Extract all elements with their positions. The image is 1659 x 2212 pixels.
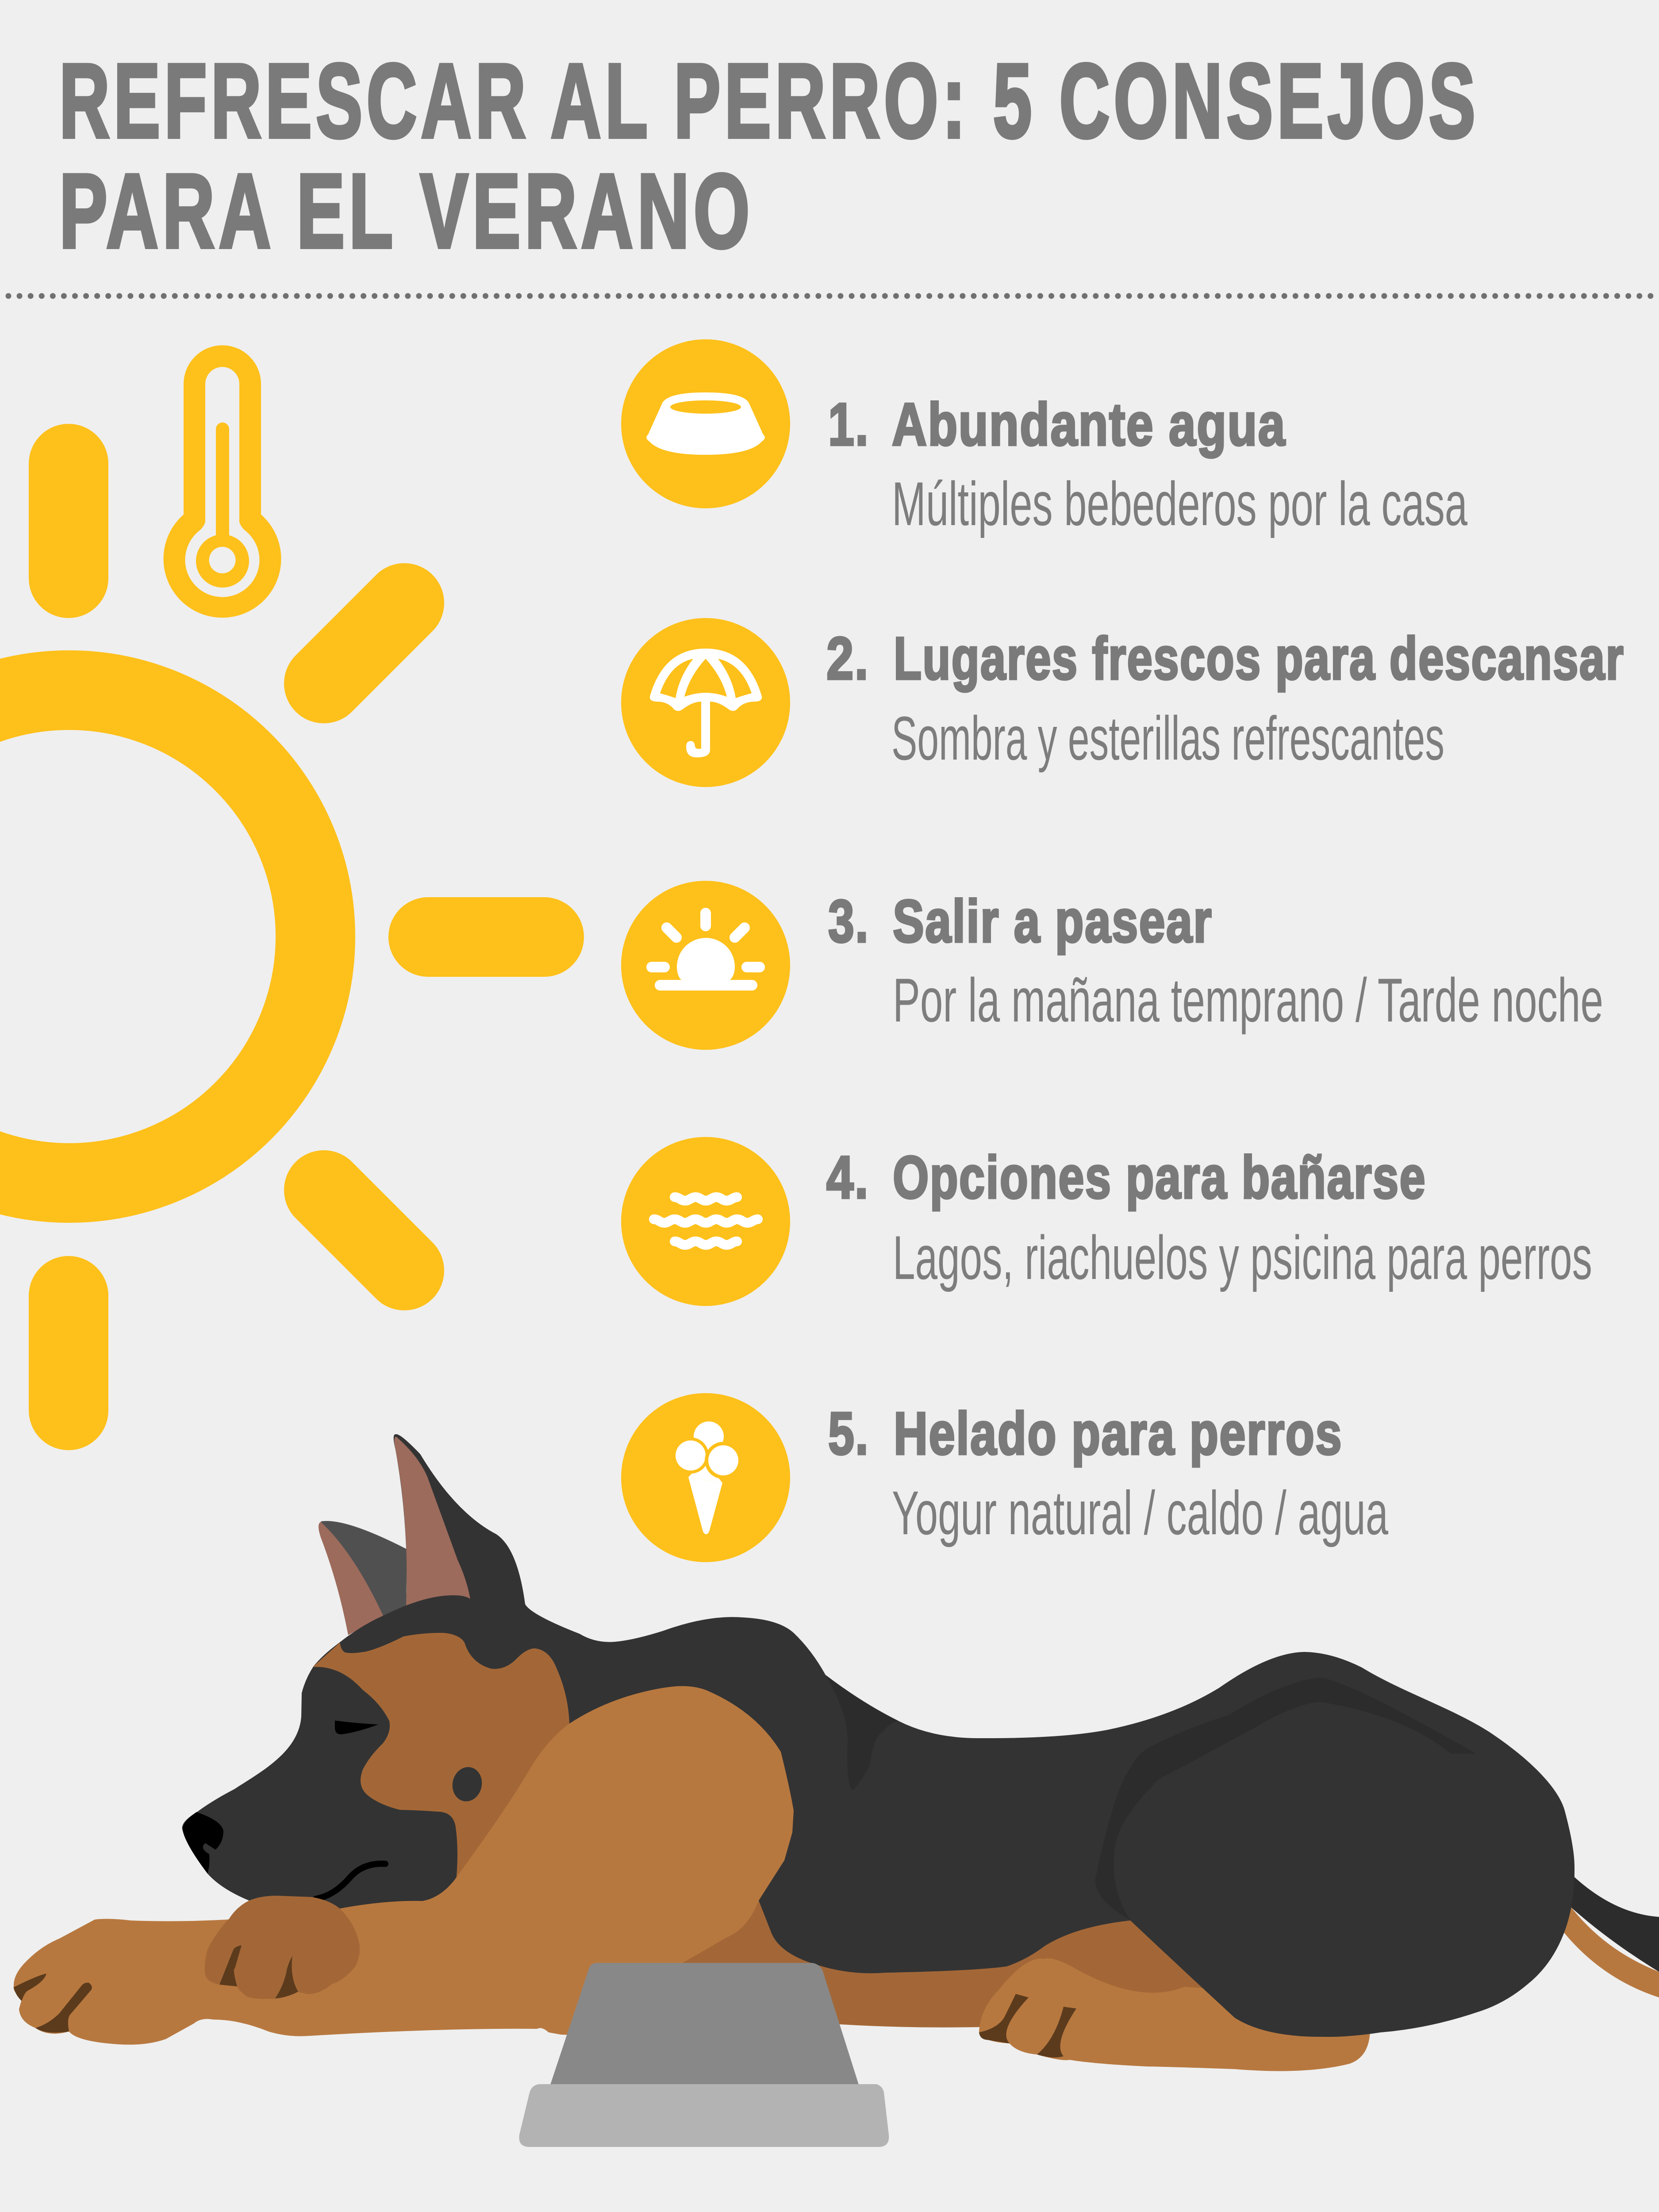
food bowl (519, 1963, 889, 2147)
front paw toes (14, 1974, 92, 2033)
dog tail (1562, 1869, 1659, 1997)
tip 1: water bowl (621, 339, 1467, 538)
front leg and shoulder (14, 1686, 794, 2045)
icon: umbrella (621, 618, 790, 787)
text: tip 5: Yogur natural / caldo / agua (892, 1478, 1388, 1548)
text: tip 3 (828, 887, 1603, 1035)
resting paw (205, 1896, 360, 1999)
text: tip 4: 4. (826, 1144, 869, 1211)
text: tip 4: Opciones para bañarse (893, 1144, 1426, 1211)
icon: water waves (621, 1137, 790, 1306)
title (59, 42, 1479, 270)
icon: sunrise (621, 881, 790, 1050)
text: tip 3: 3. (828, 887, 869, 955)
text: tip 5 (828, 1400, 1388, 1548)
text: tip 5: 5. (828, 1400, 869, 1467)
tip 2: cool places (621, 618, 1624, 787)
text: tip 5: Helado para perros (894, 1400, 1343, 1467)
hind paw (979, 1959, 1370, 2071)
tip 5: dog ice cream (621, 1393, 1388, 1562)
icon: water bowl (621, 339, 790, 508)
head tan patch (314, 1633, 569, 1885)
icon: thermometer (164, 345, 281, 618)
illustration: sleeping German shepherd (14, 1434, 1659, 2147)
text: tip 2: 2. (826, 625, 869, 692)
tip 4: bathing (621, 1137, 1592, 1306)
body shadows (826, 1675, 1476, 1920)
text: tip 1: 1. (828, 391, 869, 458)
nose (183, 1812, 223, 1874)
dog body, head and near ear silhouette (182, 1434, 1575, 2037)
tip 3: walks (621, 881, 1603, 1050)
text: tip 2 (826, 625, 1624, 773)
far ear (319, 1521, 407, 1635)
text: tip 3: Salir a pasear (893, 887, 1213, 955)
belly and hind leg (664, 1893, 1261, 2035)
near ear inner (394, 1436, 470, 1605)
icon: sun (0, 464, 544, 1410)
text: tip 1: Abundante agua (892, 391, 1286, 458)
closed eye (335, 1720, 378, 1734)
icon: ice cream (621, 1393, 790, 1562)
ear spot (449, 1764, 485, 1804)
text: tip 4 (826, 1144, 1592, 1292)
mouth (316, 1864, 385, 1899)
title: PARA EL VERANO (59, 153, 754, 270)
text: tip 1 (828, 391, 1467, 538)
